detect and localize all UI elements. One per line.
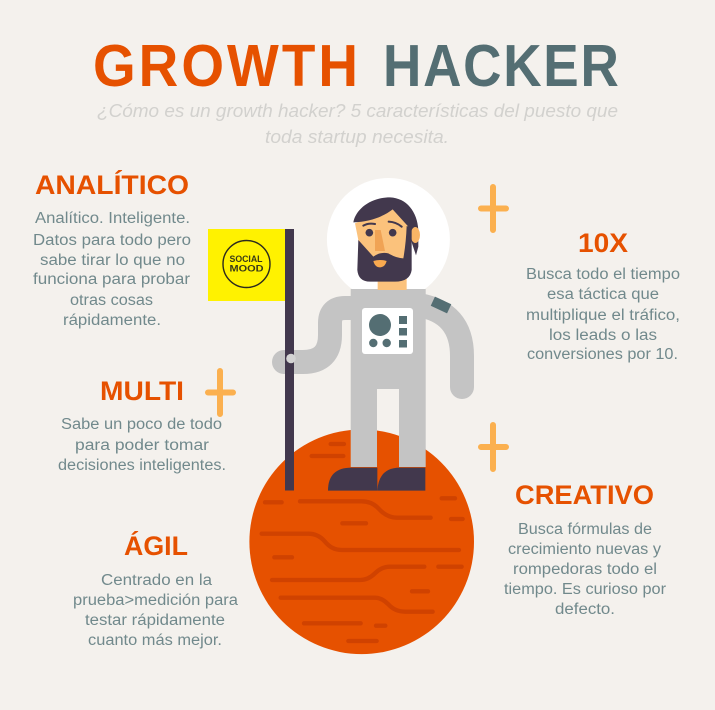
block: creativo: defecto. xyxy=(555,601,615,618)
flag pole xyxy=(285,229,294,490)
block: analítico: Analítico. Inteligente. xyxy=(35,210,190,227)
subtitle: ¿Cómo es un growth hacker? 5 características del puesto que xyxy=(97,100,618,121)
block: 10x xyxy=(526,228,680,363)
block: 10x: 10X xyxy=(578,228,628,258)
block: ágil: ÁGIL xyxy=(124,530,188,561)
suit arms xyxy=(284,308,360,362)
block: ágil: cuanto más mejor. xyxy=(88,632,222,649)
logo: Social Mood xyxy=(223,240,270,288)
block: analítico: Datos para todo pero xyxy=(33,232,191,249)
block: multi: para poder tomar xyxy=(75,437,209,454)
block: multi: Sabe un poco de todo xyxy=(61,416,222,433)
subtitle: toda startup necesita. xyxy=(265,126,449,147)
block: creativo: Busca fórmulas de xyxy=(518,521,652,538)
block: multi xyxy=(58,376,226,474)
block: multi: MULTI xyxy=(100,376,184,406)
logo: Social Mood: SOCIAL xyxy=(230,254,263,265)
block: creativo: tiempo. Es curioso por xyxy=(504,581,666,598)
block: analítico: sabe tirar lo que no xyxy=(40,252,185,269)
block: 10x: los leads o las xyxy=(549,327,657,344)
head xyxy=(353,197,420,290)
suit body and legs xyxy=(351,289,426,467)
block: ágil: Centrado en la xyxy=(101,572,212,589)
block: analítico: ANALÍTICO xyxy=(35,169,189,200)
block: 10x: Busca todo el tiempo xyxy=(526,266,680,283)
block: creativo xyxy=(504,480,666,618)
block: analítico xyxy=(33,169,191,329)
flag with logo xyxy=(208,229,286,301)
subtitle xyxy=(97,100,618,147)
block: analítico: otras cosas xyxy=(70,292,153,309)
shoes xyxy=(328,468,425,491)
block: analítico: funciona para probar xyxy=(33,271,190,288)
title: GROWTH xyxy=(93,33,358,99)
block: 10x: conversiones por 10. xyxy=(527,346,678,363)
logo: Social Mood: MOOD xyxy=(230,264,264,275)
helmet xyxy=(327,178,450,301)
block: ágil xyxy=(73,530,238,649)
astronaut xyxy=(284,178,462,491)
plus icon: creativo xyxy=(481,425,506,469)
plus icon: top right xyxy=(481,187,506,230)
block: creativo: crecimiento nuevas y xyxy=(508,541,661,558)
block: creativo: rompedoras todo el xyxy=(513,561,657,578)
shoulder patch xyxy=(431,297,451,313)
block: multi: decisiones inteligentes. xyxy=(58,457,226,474)
title: HACKER xyxy=(383,32,619,99)
block: 10x: multiplique el tráfico, xyxy=(526,307,680,324)
block: ágil: prueba>medición para xyxy=(73,592,238,609)
title xyxy=(93,32,619,99)
planet xyxy=(249,430,474,654)
block: 10x: esa táctica que xyxy=(547,286,659,303)
hand xyxy=(286,354,296,363)
chest panel xyxy=(362,308,413,354)
plus icon: multi xyxy=(208,371,233,414)
block: ágil: testar rápidamente xyxy=(85,612,225,629)
block: creativo: CREATIVO xyxy=(515,480,654,510)
block: analítico: rápidamente. xyxy=(63,312,161,329)
